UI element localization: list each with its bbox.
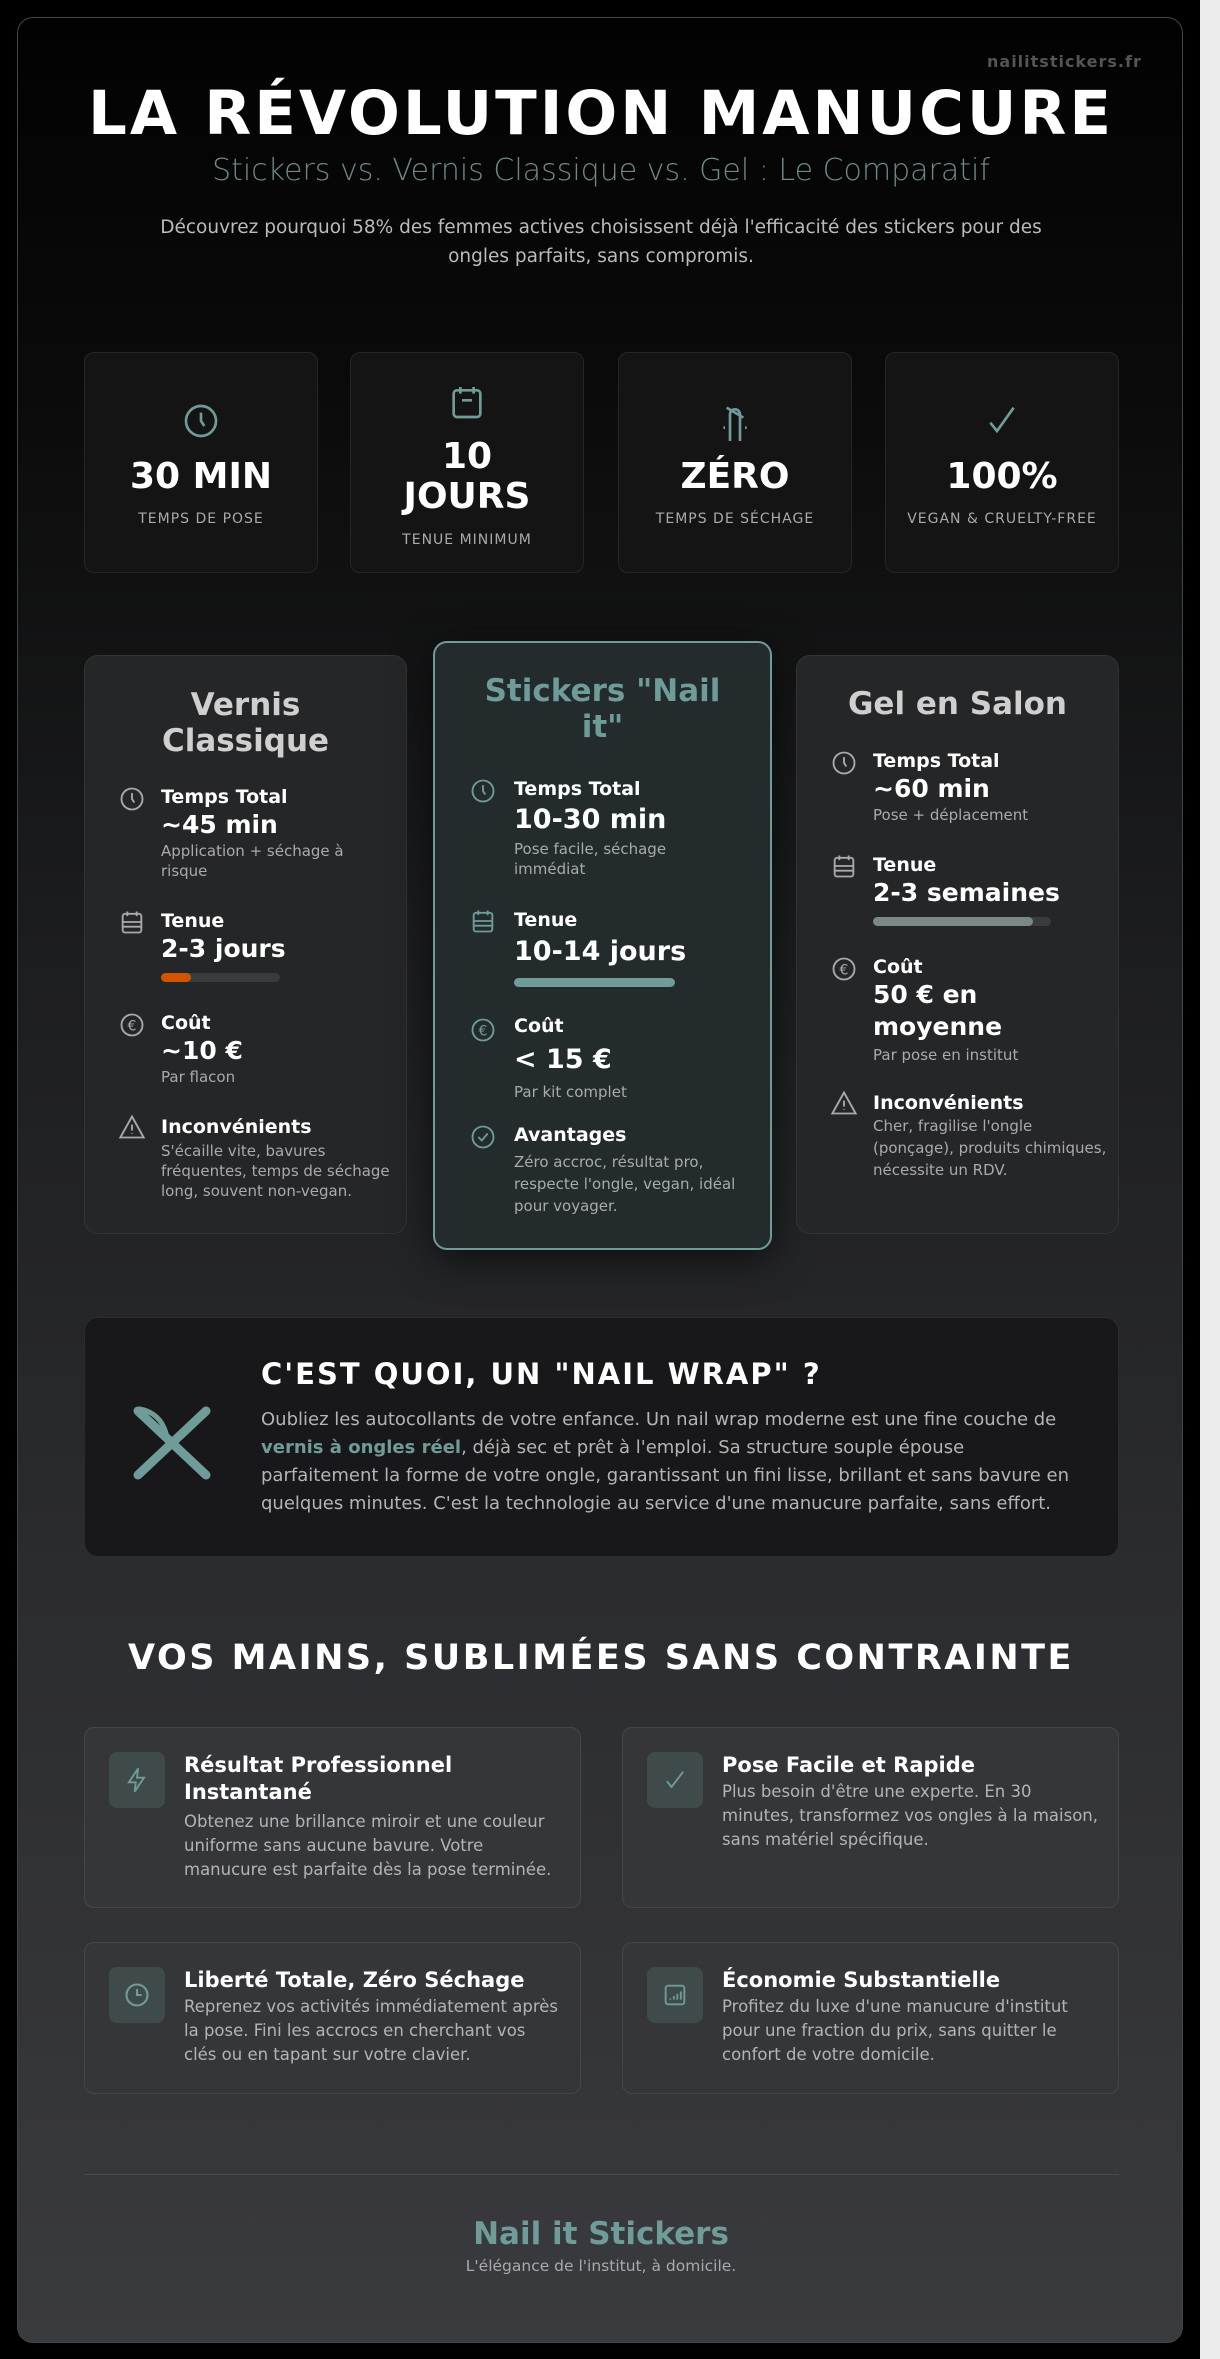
item: cout: ~10 € <box>161 1036 243 1065</box>
feature: economie: Économie Substantielle <box>722 1968 1000 1992</box>
feature: pose facile <box>622 1727 1119 1908</box>
item: avantages: Zéro accroc, résultat pro, respecte l'ongle, vegan, idéal pour voyager. <box>514 1153 735 1215</box>
heading: Stickers "Nail <box>485 673 720 709</box>
panel: stickers nail it: € <box>479 1023 487 1039</box>
item: temps: Application + séchage à risque <box>161 842 344 880</box>
stat: 10 jours: JOURS <box>404 476 530 517</box>
item: cout: Coût <box>514 1015 564 1037</box>
footer tagline: L'élégance de l'institut, à domicile. <box>466 2257 736 2275</box>
item: cout <box>832 956 1018 1064</box>
item: tenue: 2-3 jours <box>161 934 286 963</box>
brand url: nailitstickers.fr <box>987 52 1142 71</box>
heading: Vernis <box>191 687 300 723</box>
panel: stickers nail it <box>433 641 772 1250</box>
panel: vernis classique <box>84 655 407 1234</box>
item: cout <box>120 1012 243 1086</box>
item: tenue: Tenue <box>873 854 936 876</box>
item: temps: Temps Total <box>873 750 1000 772</box>
feature: resultat pro <box>84 1727 581 1908</box>
item: cout: 50 € en moyenne <box>873 980 1002 1041</box>
icon: check <box>989 407 1015 434</box>
footer brand: Nail it Stickers <box>473 2216 729 2252</box>
stat: 100%: VEGAN & CRUELTY-FREE <box>907 511 1097 527</box>
item: temps: 10-30 min <box>514 804 666 835</box>
item: cout: Par flacon <box>161 1068 235 1086</box>
feature: pose facile: Plus besoin d'être une experte. En 30 minutes, transformez vos ongles à la maison, sans matériel spécifique. <box>722 1782 1098 1849</box>
icon: calendar <box>452 387 482 418</box>
feature: liberte: Reprenez vos activités immédiatement après la pose. Fini les accrocs en cherchant vos clés ou en tapant sur votre clavier. <box>184 1997 558 2064</box>
icon: bolt <box>109 1752 165 1808</box>
stat: zero: TEMPS DE SÉCHAGE <box>656 511 814 527</box>
subtitle: Stickers vs. Vernis Classique vs. Gel : Le Comparatif <box>212 153 990 188</box>
item: temps <box>472 778 666 878</box>
stat: zero: ZÉRO <box>680 456 790 497</box>
stat: 10 jours: 10 <box>442 436 492 477</box>
item: tenue <box>472 909 686 987</box>
item: avantages: Avantages <box>514 1124 626 1146</box>
panel: vernis classique: € <box>128 1018 136 1034</box>
feature: economie <box>622 1942 1119 2094</box>
icon: crossed tools <box>134 1406 210 1480</box>
item: temps: ~60 min <box>873 774 990 803</box>
item: temps <box>832 750 1028 824</box>
intro text: Découvrez pourquoi 58% des femmes actives choisissent déjà l'efficacité des stickers pour des ongles parfaits, sans compromis. <box>160 217 1042 267</box>
icon: check <box>647 1752 703 1808</box>
item: temps: Temps Total <box>514 778 641 800</box>
item: tenue: 10-14 jours <box>514 936 686 967</box>
item: inconvenients: Cher, fragilise l'ongle (ponçage), produits chimiques, nécessite un RDV. <box>873 1117 1106 1179</box>
item: temps: Pose + déplacement <box>873 806 1028 824</box>
item: tenue <box>122 910 286 982</box>
feature: liberte: Liberté Totale, Zéro Séchage <box>184 1968 524 1992</box>
panel: nail wrap explanation <box>84 1317 1119 1557</box>
heading <box>162 687 329 759</box>
heading: Gel en Salon <box>848 686 1067 722</box>
section heading: VOS MAINS, SUBLIMÉES SANS CONTRAINTE <box>128 1638 1074 1678</box>
item: cout: Coût <box>873 956 923 978</box>
feature: pose facile: Pose Facile et Rapide <box>722 1753 975 1777</box>
item: inconvenients: Inconvénients <box>161 1116 312 1138</box>
heading: Classique <box>162 723 329 759</box>
stat: 30 min <box>84 352 318 573</box>
item: tenue: Tenue <box>161 910 224 932</box>
feature: resultat pro: Résultat Professionnel Instantané <box>184 1753 452 1804</box>
feature: resultat pro: Obtenez une brillance miroir et une couleur uniforme sans aucune bavure. Votre manucure est parfaite dès la pose terminée. <box>184 1812 551 1879</box>
item: inconvenients <box>830 1090 1106 1179</box>
icon: chart <box>647 1967 703 2023</box>
feature: economie: Profitez du luxe d'une manucure d'institut pour une fraction du prix, sans quitter le confort de votre domicile. <box>722 1997 1068 2064</box>
item: cout: Coût <box>161 1012 211 1034</box>
stat: 30 min: TEMPS DE POSE <box>138 511 264 527</box>
item: cout: Par kit complet <box>514 1083 627 1101</box>
item: inconvenients: Inconvénients <box>873 1092 1024 1114</box>
stat: 10 jours: TENUE MINIMUM <box>402 532 532 548</box>
item: cout: < 15 € <box>514 1044 612 1075</box>
item: avantages <box>472 1124 735 1215</box>
heading: C'EST QUOI, UN "NAIL WRAP" ? <box>261 1357 822 1391</box>
title: LA RÉVOLUTION MANUCURE <box>88 78 1114 149</box>
paragraph: Oubliez les autocollants de votre enfance. Un nail wrap moderne est une fine couche de vernis à ongles réel, déjà sec et prêt à l'emploi. Sa structure souple épouse parfaitement la forme de votre ongle, garantissant un fini lisse, brillant et sans bavure en quelques minutes. C'est la technologie au service d'une manucure parfaite, sans effort. <box>261 1409 1069 1514</box>
item: inconvenients: S'écaille vite, bavures fréquentes, temps de séchage long, souvent non-vegan. <box>161 1142 390 1200</box>
panel: gel en salon: € <box>840 962 848 978</box>
feature: liberte <box>84 1942 581 2094</box>
item: tenue <box>834 854 1060 926</box>
item: temps: Temps Total <box>161 786 288 808</box>
stat: 100% <box>885 352 1119 573</box>
icon: finger <box>723 406 747 441</box>
item: temps: ~45 min <box>161 810 278 839</box>
icon: clock <box>184 404 218 438</box>
stat: 30 min: 30 MIN <box>130 456 272 497</box>
item: tenue: 2-3 semaines <box>873 878 1060 907</box>
heading <box>485 673 720 745</box>
panel: gel en salon <box>796 655 1119 1234</box>
stat: 10 jours <box>350 352 584 573</box>
stat: zero <box>618 352 852 573</box>
item: tenue: Tenue <box>514 909 577 931</box>
icon: clock <box>109 1967 165 2023</box>
stat: 100%: 100% <box>946 456 1058 497</box>
heading: it" <box>582 709 623 745</box>
item: cout: Par pose en institut <box>873 1046 1018 1064</box>
item: temps <box>120 786 344 880</box>
item: temps: Pose facile, séchage immédiat <box>514 840 666 878</box>
item: cout <box>472 1015 627 1101</box>
item: inconvenients <box>118 1114 390 1200</box>
